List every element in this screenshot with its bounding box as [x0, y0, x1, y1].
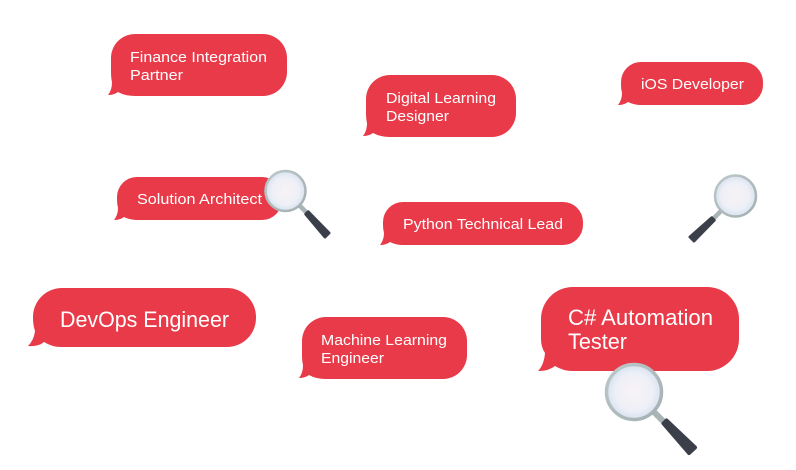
bubble: Python Technical Lead: Python Technical Lead: [403, 216, 563, 233]
bubble: C# Automation Tester: [538, 287, 739, 371]
icon: magnifying glass below C# Automation Tester: [606, 364, 695, 453]
bubble: Finance Integration Partner: Finance Integration: [130, 49, 267, 66]
bubble: Machine Learning Engineer: [299, 317, 467, 379]
bubble: C# Automation Tester: C# Automation: [568, 305, 713, 330]
bubble: Finance Integration Partner: [108, 34, 287, 96]
bubble: Digital Learning Designer: Designer: [386, 108, 449, 125]
bubble: Finance Integration Partner: Partner: [130, 67, 183, 84]
bubble: iOS Developer: iOS Developer: [641, 76, 744, 93]
bubble: Solution Architect: [114, 177, 282, 220]
icon: magnifying glass at right: [690, 176, 756, 241]
bubble: DevOps Engineer: [28, 288, 256, 347]
bubble: Digital Learning Designer: [363, 75, 516, 137]
bubble: Machine Learning Engineer: Engineer: [321, 350, 384, 367]
icon: magnifying glass by Solution Architect: [266, 171, 329, 237]
bubble: Solution Architect: Solution Architect: [137, 191, 263, 208]
bubble: DevOps Engineer: DevOps Engineer: [60, 307, 229, 332]
bubble: Digital Learning Designer: Digital Learning: [386, 90, 496, 107]
bubble: Machine Learning Engineer: Machine Learning: [321, 332, 447, 349]
bubble: C# Automation Tester: Tester: [568, 329, 627, 354]
bubble: iOS Developer: [618, 62, 763, 105]
bubble: Python Technical Lead: [380, 202, 583, 245]
